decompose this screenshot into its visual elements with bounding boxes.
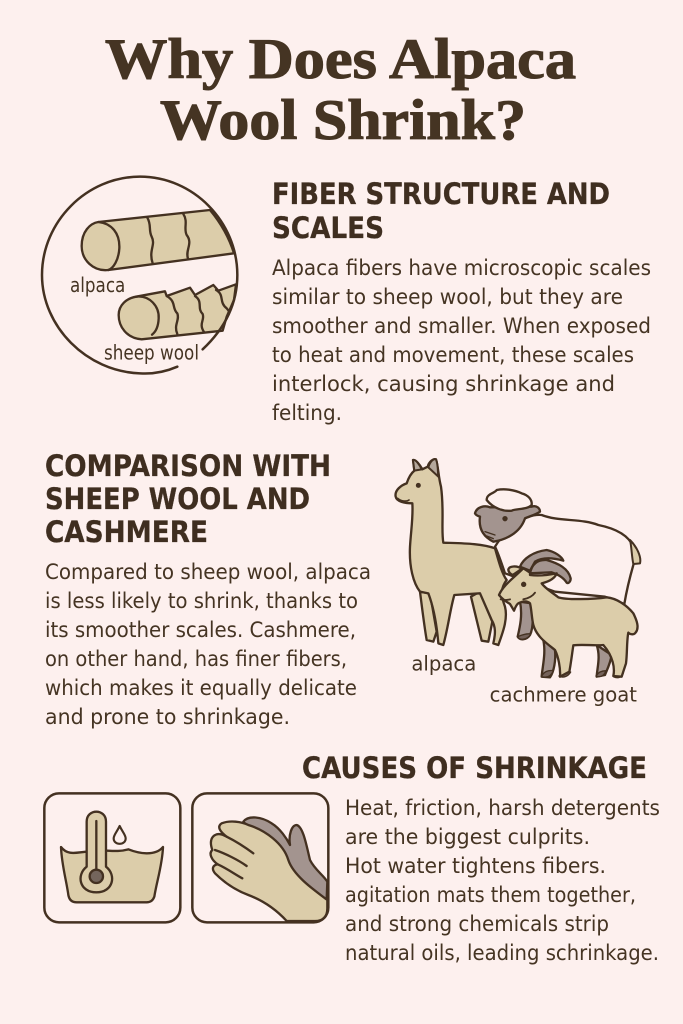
text block: comparison: which makes it equally delicate	[45, 676, 357, 701]
sheep	[475, 489, 640, 604]
icon: hands rubbing	[192, 793, 328, 922]
alpaca fiber	[82, 210, 234, 270]
circle outline	[42, 177, 237, 373]
heading: comparison: SHEEP WOOL AND	[45, 482, 310, 516]
title	[105, 28, 576, 152]
body	[499, 568, 638, 677]
ear	[508, 566, 522, 575]
heading: fiber structure	[272, 177, 610, 245]
text block: causes of shrinkage: Heat, friction, harsh detergents	[345, 796, 660, 821]
text block: comparison: Compared to sheep wool, alpaca	[45, 560, 371, 585]
goat	[499, 550, 638, 678]
heading: causes of shrinkage: CAUSES OF SHRINKAGE	[302, 751, 647, 785]
icon: alpaca and sheep wool fiber comparison	[42, 177, 237, 373]
text block: fiber structure: smoother and smaller. When exposed	[272, 314, 651, 339]
text block: fiber structure	[272, 256, 651, 426]
heading: comparison: COMPARISON WITH	[45, 449, 331, 483]
thermometer	[81, 812, 112, 892]
text block: causes of shrinkage: natural oils, leading schrinkage.	[345, 941, 659, 966]
icon: hot water basin	[44, 793, 180, 922]
text block: causes of shrinkage: agitation mats them together,	[345, 883, 636, 908]
alpaca	[396, 459, 507, 645]
text block: causes of shrinkage: are the biggest culprits.	[345, 825, 590, 850]
heading: comparison: CASHMERE	[45, 515, 208, 549]
basin with water	[61, 847, 163, 902]
water drop	[114, 826, 126, 844]
text block: fiber structure: Alpaca fibers have microscopic scales	[272, 256, 651, 281]
text block: fiber structure: to heat and movement, these scales	[272, 343, 634, 368]
text block: causes of shrinkage: and strong chemicals strip	[345, 912, 609, 937]
text block: comparison: on other hand, has finer fibers,	[45, 647, 347, 672]
horns	[520, 550, 563, 571]
text block: comparison: is less likely to shrink, thanks to	[45, 589, 358, 614]
text block: fiber structure: interlock, causing shrinkage and	[272, 372, 615, 397]
label: sheep wool: sheep wool	[104, 340, 199, 364]
heading: fiber structure: SCALES	[272, 211, 384, 245]
text block: comparison: its smoother scales. Cashmere,	[45, 618, 356, 643]
text block: causes of shrinkage	[345, 796, 660, 966]
far legs	[518, 602, 533, 639]
label: cachmere goat: cachmere goat	[490, 682, 637, 706]
heading: comparison	[45, 449, 331, 549]
text block: causes of shrinkage: Hot water tightens fibers.	[345, 854, 606, 879]
text block: comparison	[45, 560, 371, 730]
heading: fiber structure: FIBER STRUCTURE AND	[272, 177, 610, 211]
title: Wool Shrink?	[160, 89, 526, 152]
label: alpaca: alpaca	[70, 273, 125, 297]
front hand	[211, 822, 327, 921]
text block: fiber structure: similar to sheep wool, but they are	[272, 285, 623, 310]
sheep wool fiber	[119, 284, 236, 339]
text block: fiber structure: felting.	[272, 401, 342, 426]
title: Why Does Alpaca	[105, 28, 576, 91]
back hand	[243, 817, 327, 900]
illustration: alpaca, sheep and goat	[396, 459, 640, 706]
label: alpaca: alpaca	[411, 651, 476, 675]
hooves	[518, 634, 531, 639]
text block: comparison: and prone to shrinkage.	[45, 705, 290, 730]
